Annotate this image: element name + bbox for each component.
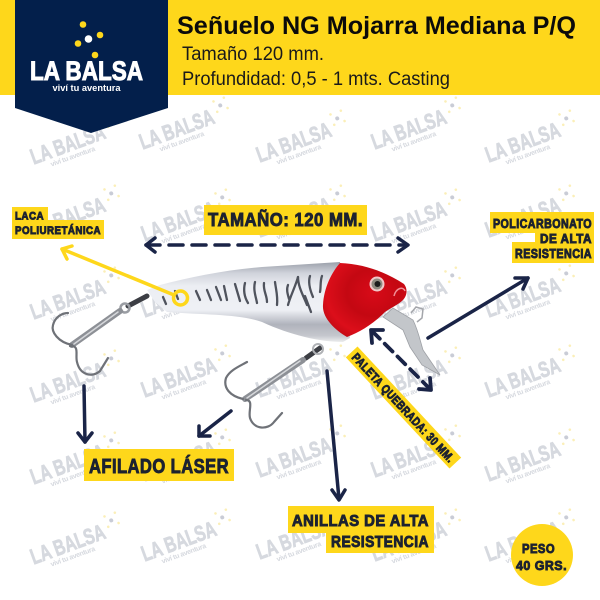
- label: split rings: [288, 506, 434, 553]
- watermark pattern: LA BALSA: viví tu aventura: [161, 299, 207, 321]
- label: split rings: RESISTENCIA: [331, 534, 429, 551]
- arrow: dashed lip length: [371, 330, 431, 390]
- body treble hook: [225, 344, 323, 428]
- watermark pattern: LA BALSA: viví tu aventura: [161, 379, 207, 401]
- watermark pattern: LA BALSA: viví tu aventura: [50, 546, 96, 568]
- arrow: yellow to lacquer: [62, 246, 188, 305]
- label: broken lip: [346, 346, 461, 469]
- watermark pattern: LA BALSA: LA BALSA: [368, 104, 450, 154]
- arrow: split rings: [327, 371, 345, 500]
- watermark pattern: LA BALSA: LA BALSA: [27, 274, 109, 324]
- watermark pattern: LA BALSA: LA BALSA: [138, 196, 220, 246]
- weight badge: [511, 524, 573, 586]
- watermark pattern: LA BALSA: viví tu aventura: [50, 146, 96, 168]
- label: lacquer: POLIURETÁNICA: [15, 224, 101, 237]
- watermark pattern: LA BALSA: viví tu aventura: [50, 219, 96, 241]
- lure mouth highlight: [394, 288, 405, 296]
- watermark pattern: LA BALSA: LA BALSA: [27, 357, 109, 407]
- body stripes: [163, 276, 322, 312]
- watermark pattern: LA BALSA: viví tu aventura: [276, 379, 322, 401]
- lure lip: [383, 307, 440, 375]
- logo flag: La Balsa: viví tu aventura: [52, 83, 121, 94]
- watermark pattern: LA BALSA: viví tu aventura: [505, 219, 551, 241]
- watermark pattern: LA BALSA: LA BALSA: [253, 432, 335, 482]
- lure eye: [370, 276, 384, 292]
- label: polycarbonate: [490, 212, 594, 263]
- watermark pattern: LA BALSA: LA BALSA: [368, 516, 450, 566]
- watermark pattern: LA BALSA: LA BALSA: [253, 117, 335, 167]
- label: lacquer: [12, 207, 104, 239]
- watermark pattern: LA BALSA: viví tu aventura: [391, 301, 437, 323]
- watermark pattern: LA BALSA: LA BALSA: [138, 516, 220, 566]
- arrow: to polycarbonate: [428, 278, 528, 338]
- watermark pattern: LA BALSA: LA BALSA: [138, 272, 220, 322]
- watermark pattern: LA BALSA: viví tu aventura: [161, 543, 207, 565]
- watermark pattern: LA BALSA: LA BALSA: [27, 192, 109, 242]
- weight badge: 40 GRS.: [516, 558, 567, 573]
- watermark pattern: LA BALSA: LA BALSA: [368, 432, 450, 482]
- watermark pattern: LA BALSA: viví tu aventura: [391, 223, 437, 245]
- watermark pattern: LA BALSA: LA BALSA: [138, 352, 220, 402]
- watermark pattern: LA BALSA: LA BALSA: [27, 119, 109, 169]
- watermark pattern: LA BALSA: viví tu aventura: [391, 381, 437, 403]
- watermark pattern: LA BALSA: viví tu aventura: [276, 541, 322, 563]
- label: laser sharpened: AFILADO LÁSER: [89, 455, 229, 478]
- watermark pattern: LA BALSA: LA BALSA: [482, 192, 564, 242]
- watermark pattern: LA BALSA: viví tu aventura: [391, 459, 437, 481]
- watermark pattern: LA BALSA: LA BALSA: [482, 352, 564, 402]
- weight badge: PESO: [522, 541, 555, 556]
- label: size: [204, 205, 367, 235]
- watermark pattern: LA BALSA: viví tu aventura: [505, 144, 551, 166]
- watermark pattern: LA BALSA: viví tu aventura: [505, 463, 551, 485]
- watermark pattern: LA BALSA: viví tu aventura: [50, 301, 96, 323]
- label: broken lip: PALETA QUEBRADA: 30 MM.: [349, 350, 457, 465]
- watermark pattern: LA BALSA: LA BALSA: [368, 196, 450, 246]
- watermark pattern: LA BALSA: LA BALSA: [368, 354, 450, 404]
- logo flag: La Balsa: [15, 0, 168, 133]
- logo flag: La Balsa: LA BALSA: [30, 56, 143, 86]
- watermark pattern: LA BALSA: LA BALSA: [27, 439, 109, 489]
- watermark pattern: LA BALSA: LA BALSA: [482, 272, 564, 322]
- watermark pattern: LA BALSA: viví tu aventura: [50, 384, 96, 406]
- watermark pattern: LA BALSA: viví tu aventura: [391, 131, 437, 153]
- label: split rings: ANILLAS DE ALTA: [292, 513, 429, 530]
- label: lacquer: LACA: [15, 210, 44, 222]
- watermark pattern: LA BALSA: viví tu aventura: [161, 463, 207, 485]
- watermark pattern: LA BALSA: viví tu aventura: [161, 223, 207, 245]
- watermark pattern: LA BALSA: LA BALSA: [253, 352, 335, 402]
- arrow: dashed length: [146, 238, 408, 252]
- title: Señuelo NG Mojarra Mediana P/Q: [177, 12, 576, 40]
- lure illustration: [53, 262, 440, 428]
- watermark pattern: LA BALSA: LA BALSA: [368, 274, 450, 324]
- watermark pattern: LA BALSA: viví tu aventura: [505, 379, 551, 401]
- watermark pattern: LA BALSA: LA BALSA: [253, 514, 335, 564]
- watermark pattern: LA BALSA: LA BALSA: [253, 192, 335, 242]
- watermark pattern: LA BALSA: LA BALSA: [482, 117, 564, 167]
- watermark pattern: LA BALSA: viví tu aventura: [50, 466, 96, 488]
- header band: [0, 0, 600, 95]
- subtitle: depth: Profundidad: 0,5 - 1 mts. Casting: [182, 69, 450, 90]
- lure red head: [323, 263, 407, 337]
- watermark pattern: LA BALSA: viví tu aventura: [505, 299, 551, 321]
- lure body: [147, 262, 350, 342]
- watermark pattern: LA BALSA: [26, 96, 582, 574]
- arrow: body hook: [199, 411, 231, 436]
- watermark pattern: LA BALSA: viví tu aventura: [505, 543, 551, 565]
- watermark pattern: LA BALSA: LA BALSA: [482, 516, 564, 566]
- label: laser sharpened: [84, 449, 234, 481]
- watermark pattern: LA BALSA: viví tu aventura: [276, 144, 322, 166]
- watermark pattern: LA BALSA: viví tu aventura: [391, 543, 437, 565]
- watermark pattern: LA BALSA: LA BALSA: [482, 436, 564, 486]
- label: polycarbonate: DE ALTA: [540, 232, 592, 246]
- watermark pattern: LA BALSA: viví tu aventura: [276, 219, 322, 241]
- watermark pattern: LA BALSA: LA BALSA: [136, 104, 218, 154]
- watermark pattern: LA BALSA: viví tu aventura: [159, 131, 205, 153]
- watermark pattern: LA BALSA: LA BALSA: [138, 436, 220, 486]
- label: size: TAMAÑO: 120 MM.: [208, 209, 363, 230]
- arrow: tail hook: [78, 386, 92, 442]
- tail treble hook: [53, 296, 147, 375]
- watermark pattern: LA BALSA: viví tu aventura: [276, 459, 322, 481]
- subtitle: size: Tamaño 120 mm.: [182, 44, 324, 65]
- watermark pattern: LA BALSA: LA BALSA: [27, 519, 109, 569]
